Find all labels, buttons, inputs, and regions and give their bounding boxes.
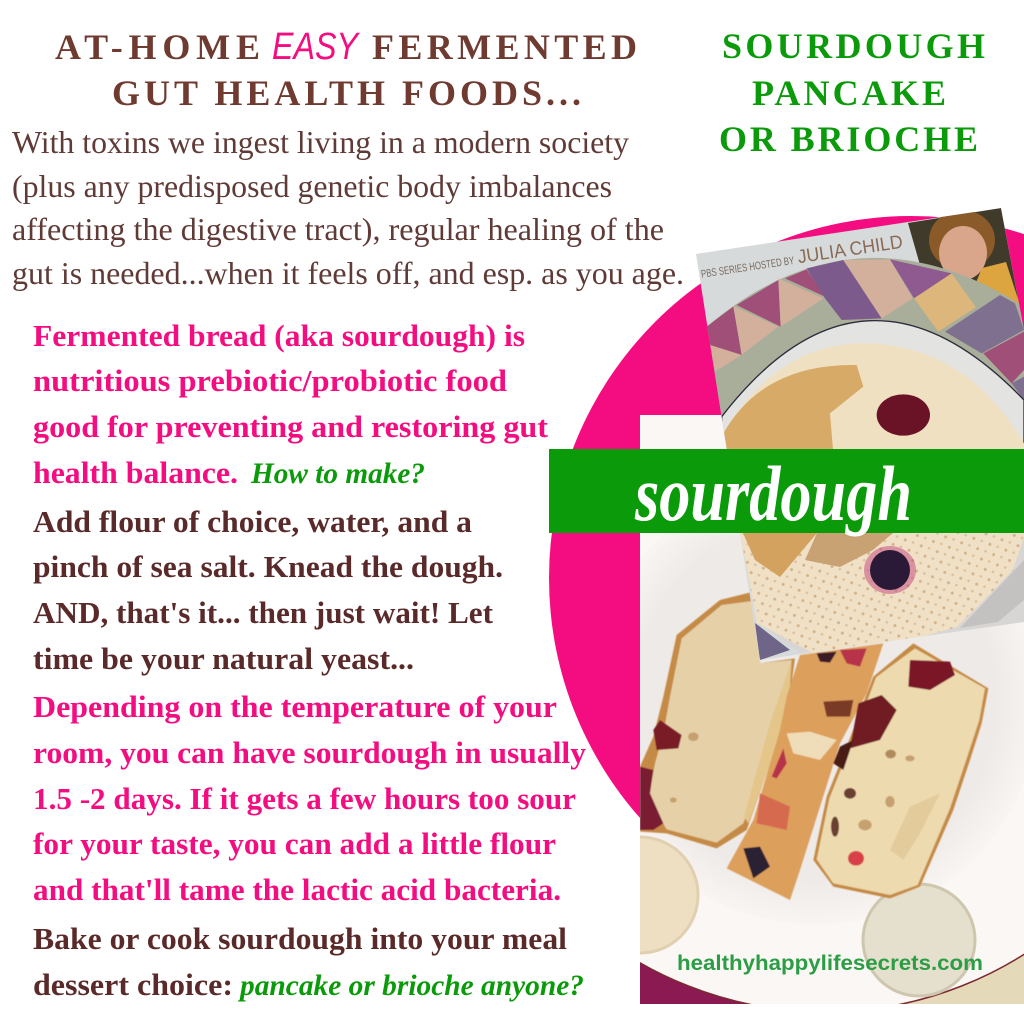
title [55,26,637,113]
green banner [549,449,1024,537]
pink text: fermented bread: How to make? [250,457,425,490]
photo: sourdough bread slices on a plate [640,415,1024,1004]
intro paragraph: affecting the digestive tract), regular healing of the [12,211,664,247]
dark text: method: Add flour of choice, water, and a [33,504,472,539]
dark text: method: time be your natural yeast... [33,641,414,676]
book credit text [701,236,902,278]
pink text: fermented bread: health balance. [33,455,238,490]
title: GUT HEALTH FOODS... [112,73,581,113]
pink text: timing: 1.5 -2 days. If it gets a few hours too sour [33,781,576,816]
intro paragraph: With toxins we ingest living in a modern society [12,124,629,160]
pink text: fermented bread [33,318,549,490]
intro paragraph: gut is needed...when it feels off, and esp. as you age. [12,255,684,291]
title: FERMENTED [372,27,637,67]
dark text: bake or cook: dessert choice: [33,967,233,1002]
heading: sourdough pancake or brioche: OR BRIOCHE [719,119,978,159]
portrait of Julia Child [908,208,1024,330]
pink text: timing: Depending on the temperature of your [33,689,557,724]
book credit text: JULIA CHILD [796,232,904,268]
pink text: timing: for your taste, you can add a little flour [33,826,556,861]
title: EASY [272,26,360,68]
lower pancake [740,533,1024,660]
dark text: method [33,504,503,676]
photo: Julia Child book page with pancake [690,200,1024,670]
dark text: bake or cook: pancake or brioche anyone? [237,969,584,1002]
pink text: fermented bread: good for preventing and restoring gut [33,409,549,444]
dark text: bake or cook: Bake or cook sourdough into your meal [33,921,567,956]
pink background circle [549,216,1024,940]
pink text: fermented bread: nutritious prebiotic/probiotic food [33,363,507,398]
pink text: timing: room, you can have sourdough in usually [33,735,586,770]
title: AT-HOME [55,27,260,67]
pink text: timing [33,689,586,907]
pink text: fermented bread: Fermented bread (aka sourdough) is [33,318,525,353]
dark text: method: AND, that's it... then just wait! Let [33,595,494,630]
website URL: healthyhappylifesecrets.com [677,952,983,975]
dark text: method: pinch of sea salt. Knead the dough. [33,549,503,584]
heading: sourdough pancake or brioche: SOURDOUGH [722,26,985,66]
pink text: timing: and that'll tame the lactic acid bacteria. [33,872,561,907]
heading: sourdough pancake or brioche: PANCAKE [752,73,946,113]
book credit text: PBS SERIES HOSTED BY [700,255,796,281]
dark text: bake or cook [33,921,584,1002]
heading: sourdough pancake or brioche [719,26,985,159]
intro paragraph [12,124,684,291]
quilt-pattern plate rim [707,258,1024,453]
banner script word: sourdough [634,450,912,537]
intro paragraph: (plus any predisposed genetic body imbalances [12,168,612,204]
